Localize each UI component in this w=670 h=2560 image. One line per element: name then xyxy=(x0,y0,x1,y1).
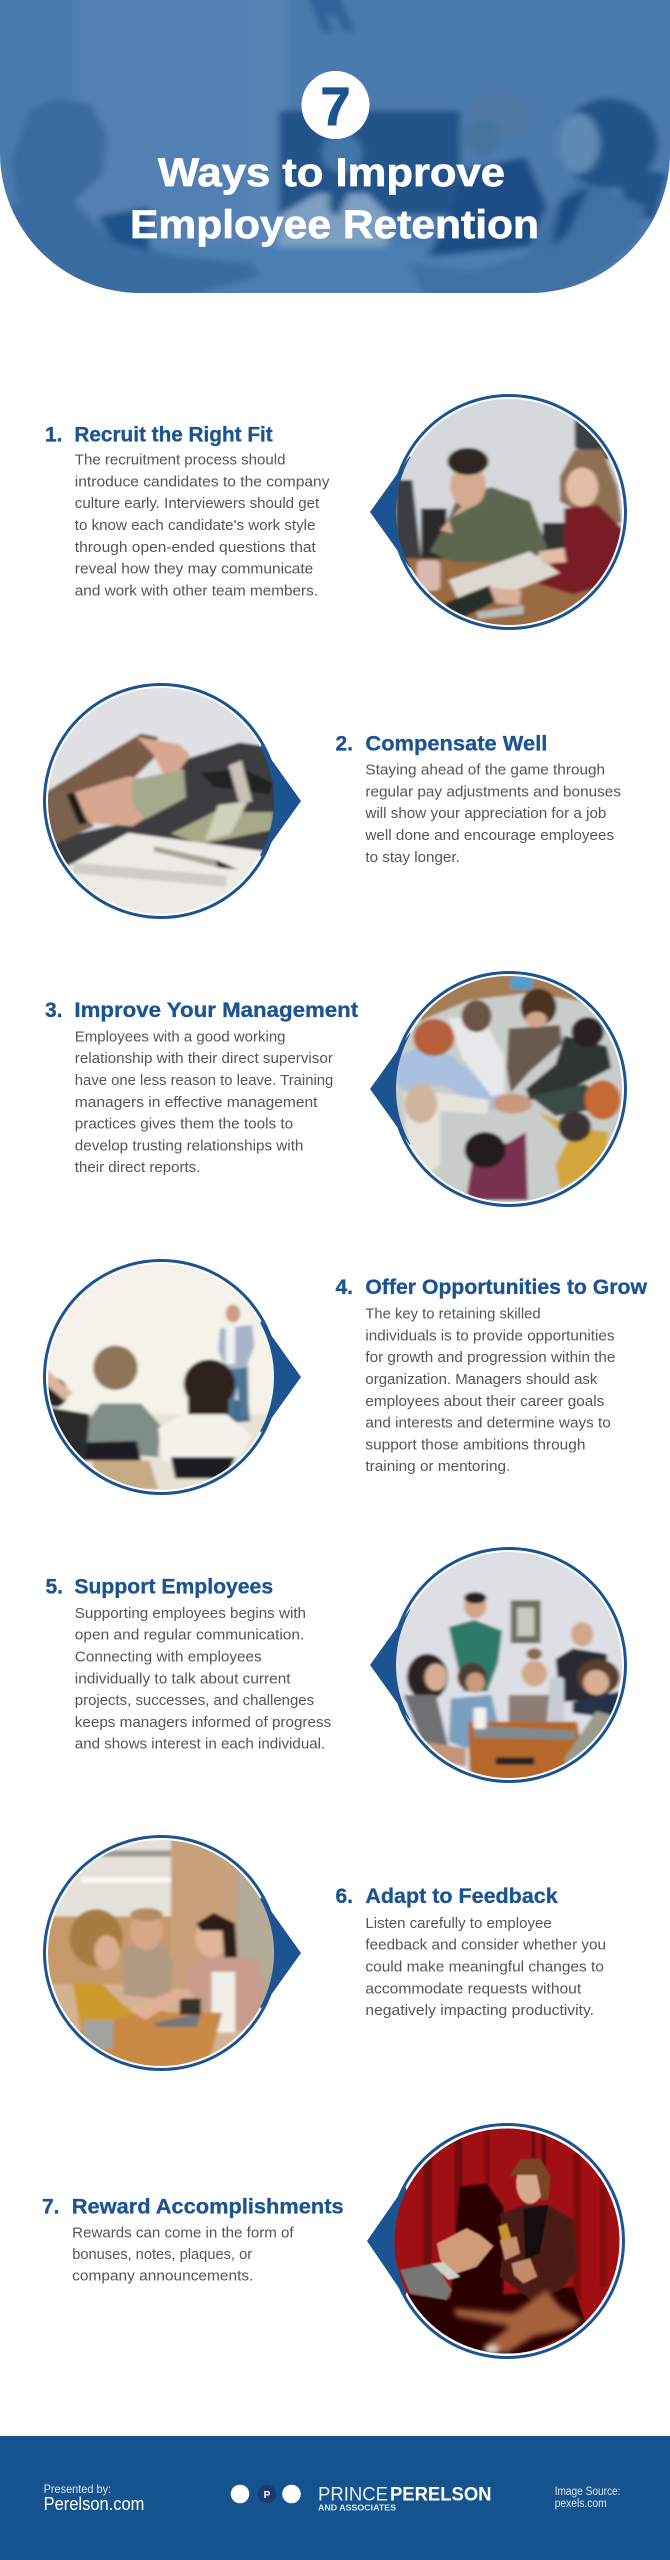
photo: team gathered around a laptop xyxy=(396,1552,622,1778)
body text 5: projects, successes, and challenges xyxy=(75,1692,314,1709)
body text 1: reveal how they may communicate xyxy=(75,561,313,578)
body text 4: The key to retaining skilled xyxy=(365,1306,541,1323)
body text 4: training or mentoring. xyxy=(365,1458,510,1475)
logo: P xyxy=(264,2490,271,2501)
body text 6: Listen carefully to employee xyxy=(365,1915,552,1932)
heading 7: Reward Accomplishments xyxy=(72,2195,344,2218)
body text 3: practices gives them the tools to xyxy=(75,1116,293,1133)
presented by: Presented by: xyxy=(44,2482,111,2496)
photo: hands counting money xyxy=(48,688,274,914)
body text 4: for growth and progression within the xyxy=(365,1349,615,1366)
body text 3: have one less reason to leave. Training xyxy=(75,1072,333,1089)
section 4: Offer Opportunities to Grow xyxy=(38,1257,648,1500)
body text 4: employees about their career goals xyxy=(365,1393,604,1410)
body text 2: will show your appreciation for a job xyxy=(364,805,606,822)
body text 3: managers in effective management xyxy=(75,1094,318,1111)
section 3: Improve Your Management xyxy=(45,968,641,1211)
body text 7 xyxy=(72,2224,294,2285)
section 5: Support Employees xyxy=(46,1545,641,1791)
photo badge 4 with pointer xyxy=(38,1257,301,1500)
number badge xyxy=(302,71,370,139)
heading 3: Improve Your Management xyxy=(74,999,358,1022)
heading 1: 1. xyxy=(45,423,63,446)
body text 5: individually to talk about current xyxy=(75,1670,291,1687)
footer band xyxy=(0,2436,670,2560)
photo: coworkers discussing at a laptop xyxy=(48,1840,274,2066)
presented by: Perelson.com xyxy=(44,2494,144,2514)
body text 1: to know each candidate's work style xyxy=(75,517,315,534)
heading 2: 2. xyxy=(336,733,353,756)
body text 4 xyxy=(365,1306,615,1475)
number badge: 7 xyxy=(320,77,351,137)
body text 4: and interests and determine ways to xyxy=(365,1415,611,1432)
hero photo: blue-tinted meeting xyxy=(0,0,670,307)
heading 4: 4. xyxy=(336,1276,353,1299)
body text 5: Supporting employees begins with xyxy=(75,1605,306,1622)
body text 2: Staying ahead of the game through xyxy=(365,762,605,779)
body text 1: through open-ended questions that xyxy=(75,539,317,556)
body text 5: Connecting with employees xyxy=(75,1648,262,1666)
heading 4: Offer Opportunities to Grow xyxy=(365,1276,648,1299)
body text 1: introduce candidates to the company xyxy=(75,473,330,490)
body text 2 xyxy=(364,762,621,866)
body text 3: relationship with their direct supervisor xyxy=(75,1050,333,1067)
body text 1: culture early. Interviewers should get xyxy=(75,495,320,512)
heading 5: 5. xyxy=(46,1576,63,1599)
title xyxy=(130,151,539,247)
body text 3 xyxy=(75,1028,333,1176)
body text 6 xyxy=(365,1915,606,2019)
body text 7: Rewards can come in the form of xyxy=(72,2224,294,2241)
body text 5: and shows interest in each individual. xyxy=(75,1736,325,1753)
heading 3: 3. xyxy=(45,999,63,1022)
section 1: Recruit the Right Fit xyxy=(45,391,641,637)
body text 4: organization. Managers should ask xyxy=(365,1371,598,1388)
photo: presenter speaking to seated audience xyxy=(48,1264,274,1490)
section 7: Reward Accomplishments xyxy=(42,2123,627,2360)
heading 2: Compensate Well xyxy=(365,733,547,756)
presented by xyxy=(44,2482,144,2514)
photo badge 6 with pointer xyxy=(38,1834,301,2077)
section 6: Adapt to Feedback xyxy=(38,1834,606,2077)
body text 1: and work with other team members. xyxy=(75,582,318,599)
body text 6: could make meaningful changes to xyxy=(365,1958,604,1976)
body text 5: open and regular communication. xyxy=(75,1627,304,1644)
body text 6: accommodate requests without xyxy=(365,1980,582,1997)
photo badge 1 with pointer xyxy=(370,391,641,637)
title: Employee Retention xyxy=(130,203,539,247)
body text 3: Employees with a good working xyxy=(75,1028,286,1045)
logo: PERELSON xyxy=(390,2484,492,2506)
body text 4: individuals is to provide opportunities xyxy=(365,1327,614,1344)
heading 1: Recruit the Right Fit xyxy=(74,423,273,446)
body text 6: feedback and consider whether you xyxy=(365,1937,606,1954)
body text 7: company announcements. xyxy=(72,2268,253,2285)
body text 6: negatively impacting productivity. xyxy=(365,2002,594,2019)
title: Ways to Improve xyxy=(158,151,505,195)
photo: award presentation before red curtain xyxy=(390,2123,627,2360)
body text 2: regular pay adjustments and bonuses xyxy=(365,783,621,800)
body text 5: keeps managers informed of progress xyxy=(75,1714,331,1731)
photo: two colleagues reviewing a clipboard xyxy=(396,399,622,625)
image source: Image Source: xyxy=(555,2486,620,2498)
heading 6: Adapt to Feedback xyxy=(365,1885,558,1908)
section 2: Compensate Well xyxy=(38,680,621,923)
body text 1 xyxy=(75,452,330,599)
body text 3: develop trusting relationships with xyxy=(75,1137,303,1154)
body text 3: their direct reports. xyxy=(75,1159,200,1176)
body text 5 xyxy=(75,1605,331,1753)
photo: team stacking hands from above xyxy=(396,976,622,1202)
image source: pexels.com xyxy=(555,2498,607,2510)
hero banner xyxy=(0,0,670,307)
logo: AND ASSOCIATES xyxy=(318,2503,397,2512)
photo badge 7 with pointer xyxy=(367,2123,627,2360)
image source xyxy=(555,2486,620,2510)
logo: PRINCE xyxy=(318,2484,388,2506)
photo badge 3 with pointer xyxy=(370,968,641,1211)
photo badge 5 with pointer xyxy=(370,1545,641,1791)
body text 2: to stay longer. xyxy=(365,849,460,866)
body text 2: well done and encourage employees xyxy=(364,827,614,844)
body text 1: The recruitment process should xyxy=(75,452,286,469)
photo badge 2 with pointer xyxy=(38,680,301,923)
body text 4: support those ambitions through xyxy=(365,1436,585,1453)
heading 7: 7. xyxy=(42,2195,60,2218)
logo xyxy=(231,2484,491,2512)
heading 6: 6. xyxy=(336,1885,353,1908)
body text 7: bonuses, notes, plaques, or xyxy=(72,2246,252,2263)
heading 5: Support Employees xyxy=(74,1576,273,1599)
